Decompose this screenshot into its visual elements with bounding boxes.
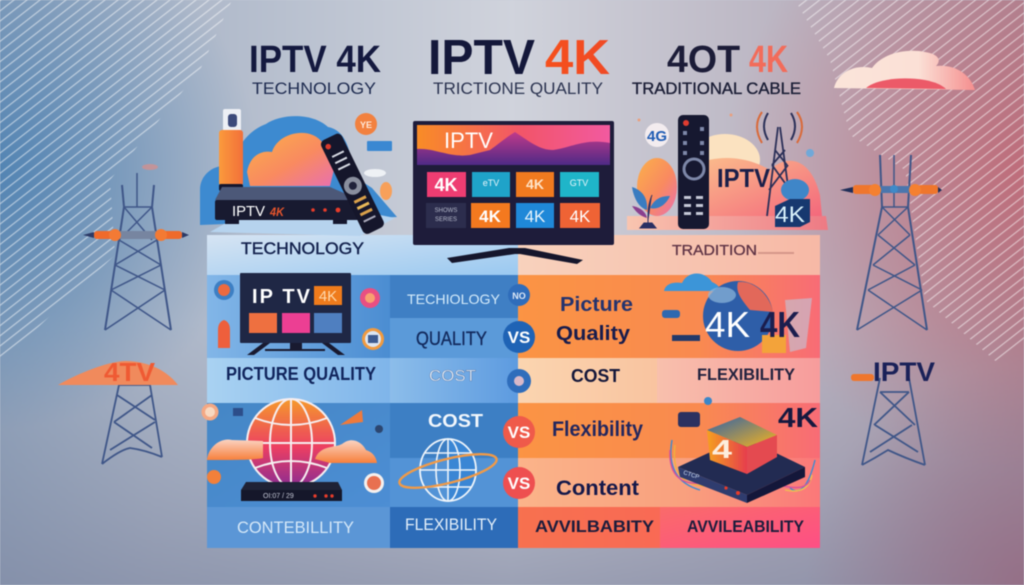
set-top box: OI:07 / 29	[263, 493, 294, 500]
title: traditional cable: 4K	[749, 39, 788, 81]
tower: bottom right with IPTV label	[851, 357, 935, 465]
illustration: small television	[214, 273, 384, 355]
tv tile row one	[427, 172, 599, 197]
tv tile row two: SHOWS	[435, 208, 457, 214]
tv tile row one: 4K	[526, 176, 544, 192]
tower: bottom right with IPTV label: IPTV	[873, 357, 935, 387]
VS badge: content	[503, 467, 535, 499]
section label: technology: TECHNOLOGY	[241, 239, 364, 258]
title: IPTV 4K technology: TECHNOLOGY	[252, 79, 376, 98]
illustration: small television: 4K	[319, 288, 337, 305]
tv tile row one: eTV	[483, 178, 499, 188]
tower: bottom left with 4TV cloud	[58, 357, 178, 464]
section label: tradition: TRADITION	[672, 242, 757, 259]
floating badges	[355, 113, 392, 200]
title: IPTV 4K technology	[249, 39, 381, 98]
middle column labels: COST	[429, 368, 476, 385]
illustration: small television: IP TV	[252, 286, 311, 308]
VS badge: content: VS	[508, 474, 530, 493]
right column labels	[535, 294, 805, 536]
set-top box	[215, 187, 360, 224]
4G badge	[645, 123, 669, 147]
middle column labels: TECHIOLOGY	[407, 291, 501, 307]
remote control	[678, 115, 709, 229]
clouds	[207, 440, 377, 463]
side icons	[214, 280, 384, 350]
tv tile row two: 4K	[479, 207, 502, 226]
label: picture quality: PICTURE QUALITY	[226, 364, 376, 384]
tower: bottom left with 4TV cloud: 4TV	[104, 357, 156, 387]
title: traditional cable	[632, 39, 801, 98]
right column labels: Content	[556, 477, 639, 500]
illustration: set-top box with remote and clouds	[200, 109, 397, 236]
title: traditional cable: TRADITIONAL CABLE	[632, 79, 801, 98]
small badge one	[508, 284, 530, 306]
middle column labels: COST	[428, 411, 483, 431]
set-top box	[241, 482, 342, 501]
remote control	[319, 132, 386, 236]
tv tile row two: 4K	[525, 207, 546, 226]
title: IPTV 4K quality: TRICTIONE QUALITY	[433, 79, 603, 98]
middle column labels: FLEXIBILITY	[405, 515, 497, 534]
top strip	[207, 235, 820, 275]
wireframe globe with ring	[397, 439, 499, 501]
title: traditional cable: 4OT	[667, 39, 740, 81]
right rows	[518, 275, 820, 548]
VS badges	[503, 284, 535, 499]
globe grid	[247, 399, 335, 487]
right column labels: Quality	[556, 323, 631, 345]
illustration: server box with 4K cube: CTCP	[682, 470, 700, 481]
tv tile row two: 4K	[570, 207, 591, 226]
tv tile row two: SERIES	[435, 217, 457, 223]
tower arms	[840, 184, 942, 196]
illustration: server box with 4K cube	[670, 397, 818, 503]
small dots	[638, 114, 814, 157]
colored cables	[670, 440, 815, 491]
tower: top left	[83, 164, 189, 330]
tower: top right	[840, 155, 942, 330]
4K block: 4K	[775, 202, 805, 227]
illustration: server box with 4K cube: 4	[712, 434, 733, 464]
right column labels: AVVILEABILITY	[687, 517, 805, 536]
VS badge: flexibility: VS	[508, 423, 530, 442]
VS badge: flexibility	[503, 416, 535, 448]
comparison table	[207, 235, 820, 548]
title: IPTV 4K quality: IPTV	[428, 31, 535, 85]
right column labels: AVVILBABITY	[535, 517, 655, 536]
tv tile row one: 4K	[434, 175, 458, 195]
floating badges: YE	[360, 120, 372, 130]
section label: tradition	[672, 242, 794, 259]
4G badge: 4G	[647, 128, 667, 145]
4K label: 4K	[778, 402, 818, 433]
VS badge: quality: VS	[508, 328, 530, 347]
right column labels: FLEXIBILITY	[697, 365, 796, 384]
title: IPTV 4K quality	[428, 31, 610, 98]
4K block	[775, 179, 810, 227]
tv tile row one: GTV	[570, 178, 588, 188]
right column labels: Picture	[560, 294, 633, 316]
tower arms	[83, 229, 189, 241]
illustration: blue globe with 4K: 4K	[760, 304, 800, 345]
cloud top right	[834, 51, 975, 90]
plant	[632, 187, 670, 228]
label: contebillity: CONTEBILLITY	[237, 518, 354, 537]
transmission tower with signal arcs	[757, 112, 802, 216]
small badge two	[507, 369, 531, 393]
middle column labels: QUALITY	[416, 329, 487, 350]
right column labels: Flexibility	[552, 418, 643, 441]
left rows	[207, 275, 518, 548]
tv tile row two	[426, 203, 600, 228]
IPTV label: IPTV	[717, 163, 771, 193]
illustration: blue globe with 4K	[662, 274, 812, 353]
set-top box: 4K	[269, 205, 285, 219]
right column labels: COST	[571, 366, 620, 386]
floating icons	[202, 404, 384, 493]
streaming stick	[219, 109, 243, 191]
VS badge: quality	[503, 321, 535, 353]
illustration: traditional remote and tower	[627, 112, 828, 230]
illustration: warm globe with clouds and set-top box	[202, 399, 384, 501]
title: IPTV 4K quality: 4K	[545, 31, 610, 85]
set-top box: IPTV	[232, 203, 265, 220]
small badge one: NO	[512, 291, 526, 301]
center television: IPTV	[444, 128, 493, 153]
middle column labels	[405, 291, 501, 534]
illustration: blue globe with 4K: 4K	[705, 304, 750, 345]
center television	[413, 121, 614, 264]
title: IPTV 4K technology: IPTV 4K	[249, 39, 381, 81]
